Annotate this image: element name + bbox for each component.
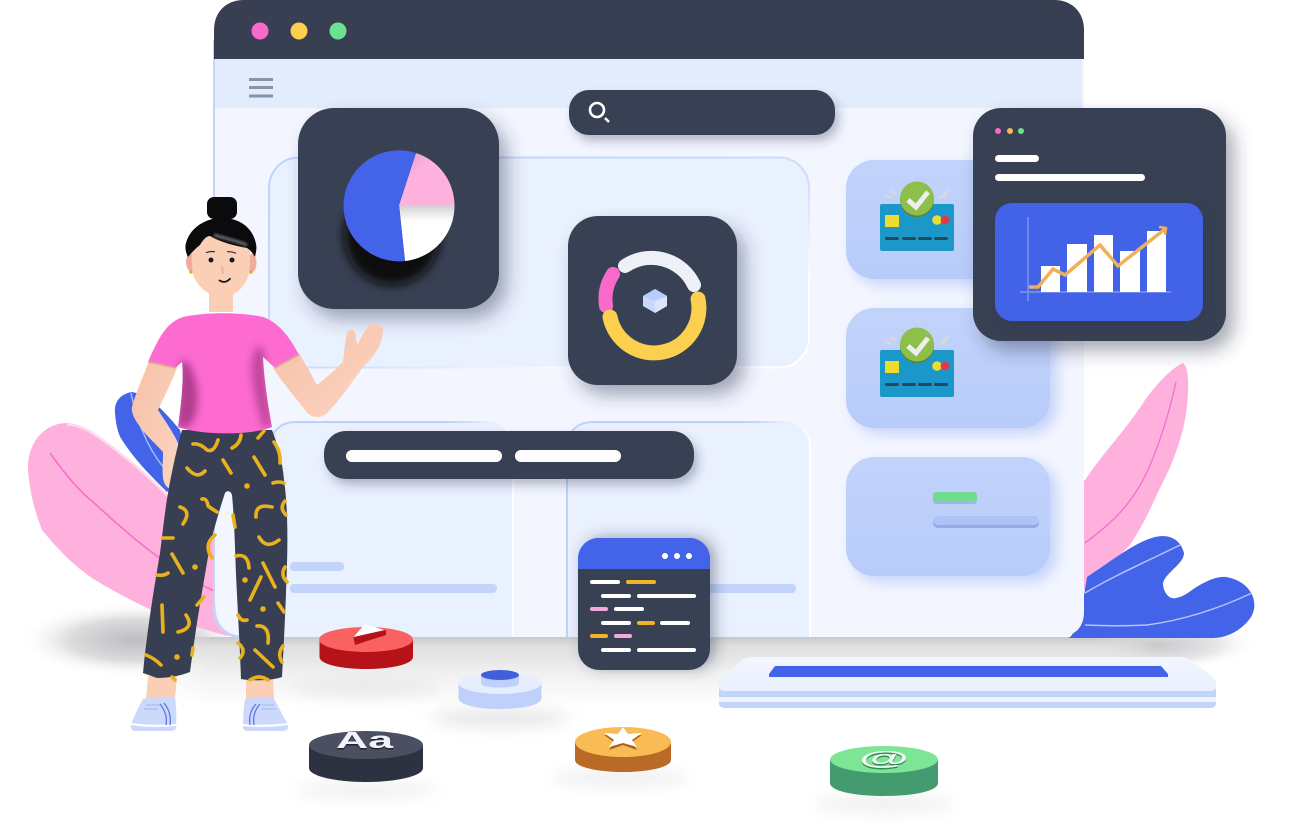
browser window (214, 0, 1084, 637)
shirt (148, 313, 299, 433)
button: play (319, 624, 413, 669)
face features (208, 258, 214, 262)
button: at sign (830, 746, 938, 796)
side card: payment approved 1 (846, 160, 1050, 279)
left blue leaf (115, 392, 190, 492)
pie chart tile (298, 108, 499, 309)
trousers (143, 430, 287, 680)
donut ring (605, 258, 699, 353)
label: at sign: @ (859, 748, 909, 770)
code lines (590, 580, 696, 652)
hair (185, 218, 256, 257)
hair bun (207, 197, 237, 219)
floating dark window with bar chart (973, 108, 1226, 341)
label: Aa: Aa (336, 727, 393, 753)
button: typography (309, 727, 423, 782)
side card: payment approved 2 (846, 308, 1050, 428)
floor shadow (17, 602, 1260, 811)
window control dots (252, 22, 346, 40)
left arm on hip (132, 358, 178, 489)
right blue leaf (1068, 536, 1254, 638)
icon: hexagon cube (643, 289, 667, 313)
icon: credit card (880, 182, 954, 251)
character: woman presenting (131, 197, 383, 731)
address bar strip (215, 59, 1082, 108)
chart axes (1020, 217, 1171, 301)
right pink leaf (1070, 363, 1188, 590)
search bar (569, 90, 835, 135)
mini window dots (995, 128, 1024, 134)
left pink leaf (28, 423, 232, 636)
button: star (575, 727, 671, 772)
icon: credit card (880, 328, 954, 397)
dark pill with text bars (324, 431, 694, 479)
title bar (214, 0, 1084, 59)
keyboard platform (719, 657, 1216, 708)
neck (209, 290, 233, 313)
side card: status (846, 457, 1050, 576)
chart card (995, 203, 1203, 321)
pie slices (343, 150, 455, 261)
panel: lower left card (270, 422, 513, 637)
donut chart tile (568, 216, 737, 385)
panel: main chart card (269, 158, 809, 368)
code window (578, 538, 710, 670)
trend line (1029, 227, 1166, 287)
bars (1041, 231, 1166, 292)
left leg shoe (131, 676, 177, 731)
right arm raised (273, 324, 383, 417)
hamburger menu icon (249, 78, 273, 98)
collar (208, 312, 234, 315)
text bars (995, 155, 1145, 181)
head (185, 197, 256, 297)
icon: magnifier (590, 103, 609, 122)
panel: lower right card (567, 422, 810, 637)
pie shadow (344, 185, 440, 285)
trouser pattern (146, 431, 287, 680)
right leg shoe (243, 678, 288, 731)
button: toggle (458, 670, 542, 709)
